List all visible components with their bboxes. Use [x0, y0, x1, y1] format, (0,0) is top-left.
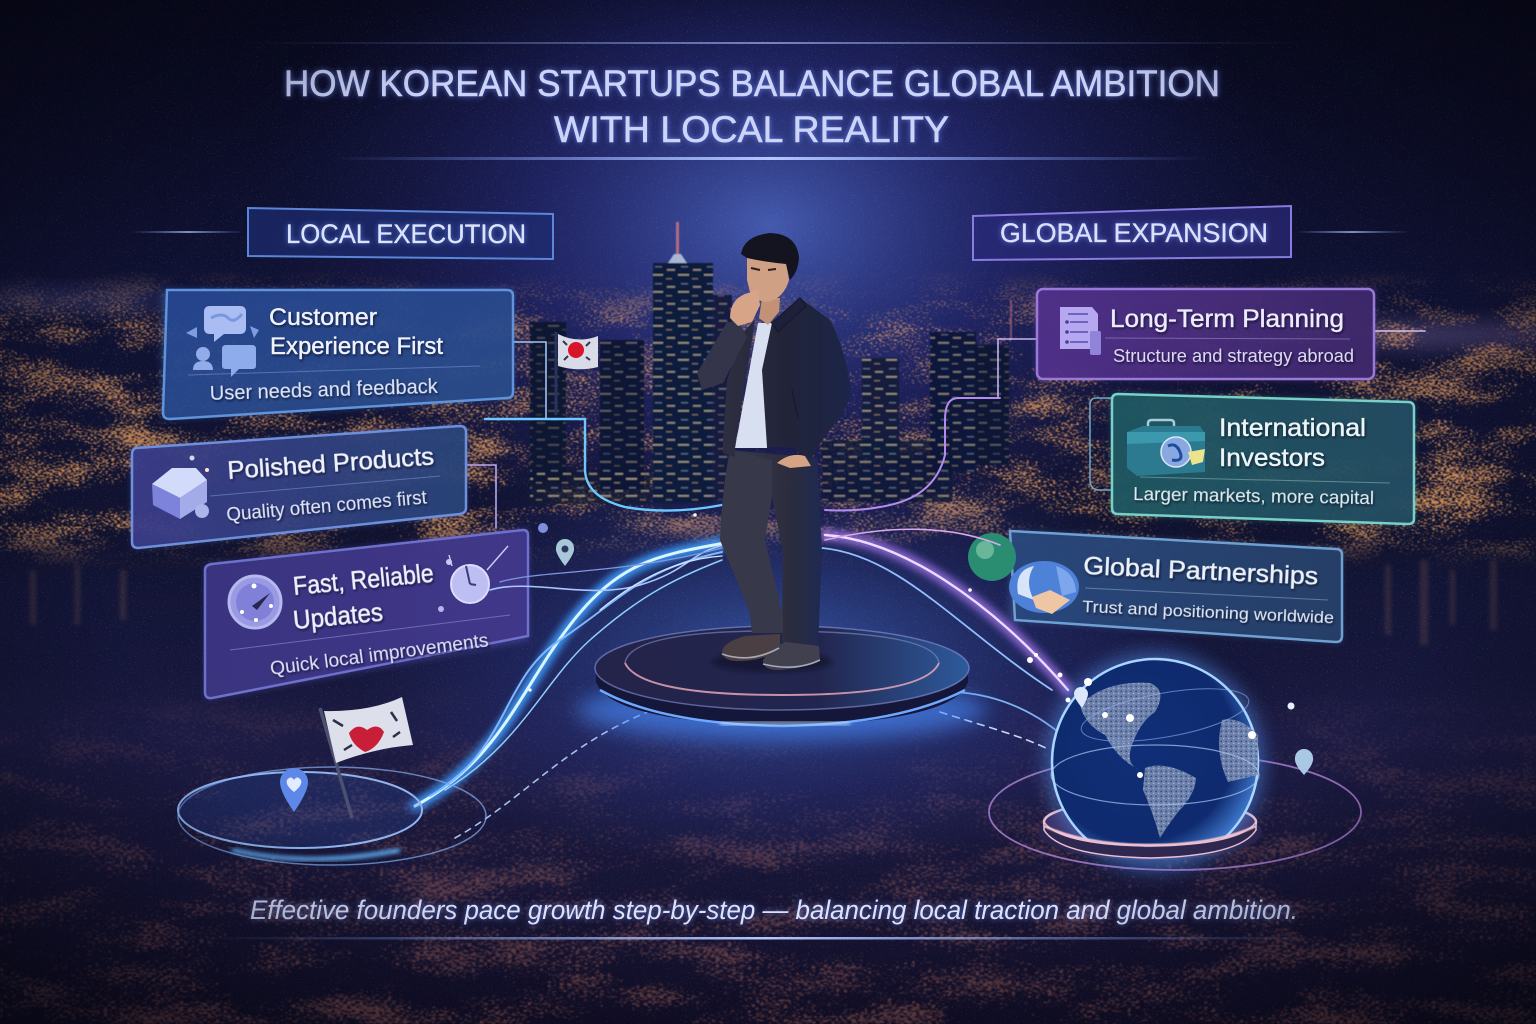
panel: fast, reliable updates: Fast, Reliable — [292, 558, 435, 601]
hair — [741, 233, 799, 280]
central platform — [577, 626, 987, 740]
hand in pocket — [777, 455, 811, 468]
raised arm — [697, 322, 747, 390]
title — [284, 63, 1220, 150]
icon: stopwatch — [438, 546, 508, 612]
panel: long-term planning: Structure and strategy abroad — [1113, 346, 1354, 366]
title underline — [330, 157, 1210, 160]
panel: polished products: Quality often comes first — [226, 487, 428, 526]
base front rim — [1044, 822, 1256, 858]
panel: global partnerships — [968, 531, 1342, 642]
panel: global partnerships: Trust and positioning worldwide — [1082, 597, 1334, 627]
top rule — [240, 42, 1300, 44]
bottom rule — [200, 937, 1330, 940]
local base with korean flag — [178, 697, 486, 865]
panel: polished products: Polished Products — [226, 443, 435, 485]
continents — [1080, 683, 1258, 838]
panel: long-term planning — [1037, 289, 1374, 379]
panel: fast, reliable updates: Updates — [292, 596, 384, 635]
connector lines — [467, 331, 1425, 528]
city skyline — [530, 222, 1012, 504]
flag — [320, 697, 413, 818]
section header: local execution: LOCAL EXECUTION — [286, 219, 526, 249]
jacket collar and pocket — [772, 298, 806, 418]
section header: global expansion: GLOBAL EXPANSION — [1000, 218, 1268, 248]
panel: customer experience first: Customer — [269, 304, 377, 331]
white shirt — [735, 323, 773, 448]
icon: gauge — [229, 576, 281, 628]
flowing light paths: local side — [415, 543, 725, 838]
hand at chin — [730, 290, 760, 326]
shoes — [722, 634, 820, 670]
map pin upper left — [538, 523, 574, 566]
head — [747, 255, 789, 302]
icon: globe and handshake — [968, 533, 1079, 614]
title: HOW KOREAN STARTUPS BALANCE GLOBAL AMBITION — [284, 63, 1220, 104]
panel: international investors — [1112, 394, 1414, 524]
panel: fast, reliable updates: Quick local improvements — [269, 630, 490, 680]
panel: international investors: Larger markets, more capital — [1133, 483, 1374, 508]
panel: customer experience first: User needs and feedback — [209, 376, 439, 405]
neck — [759, 298, 780, 325]
panel: fast, reliable updates — [205, 529, 528, 699]
closing statement: Effective founders pace growth step-by-step — balancing local traction and global ambition. — [250, 895, 1298, 925]
panel: global partnerships: Global Partnerships — [1083, 552, 1319, 591]
flowing light paths: global side — [822, 529, 1068, 750]
jacket — [723, 298, 851, 460]
sparkles — [528, 513, 1062, 692]
section header: local execution — [130, 208, 553, 259]
icon: briefcase with globe — [1127, 420, 1205, 476]
legs — [720, 450, 822, 648]
contact shadow — [712, 652, 832, 672]
panel: long-term planning: Long-Term Planning — [1110, 305, 1344, 333]
panel: customer experience first: Experience First — [270, 333, 443, 360]
panel: international investors: International — [1219, 414, 1366, 442]
left leg — [720, 450, 783, 633]
section header: global expansion — [973, 206, 1410, 260]
person: thinking founder — [697, 233, 851, 672]
title: WITH LOCAL REALITY — [554, 109, 949, 150]
pin — [280, 768, 308, 812]
panel: customer experience first — [162, 289, 513, 419]
pin — [1295, 749, 1313, 775]
panel: polished products — [131, 426, 466, 548]
panel: international investors: Investors — [1219, 444, 1325, 472]
small korean flag in skyline — [556, 332, 598, 415]
icon: product box — [152, 456, 209, 519]
globe with base — [989, 654, 1361, 870]
icon: checklist document — [1060, 307, 1101, 355]
icon: chat bubbles — [186, 306, 259, 377]
